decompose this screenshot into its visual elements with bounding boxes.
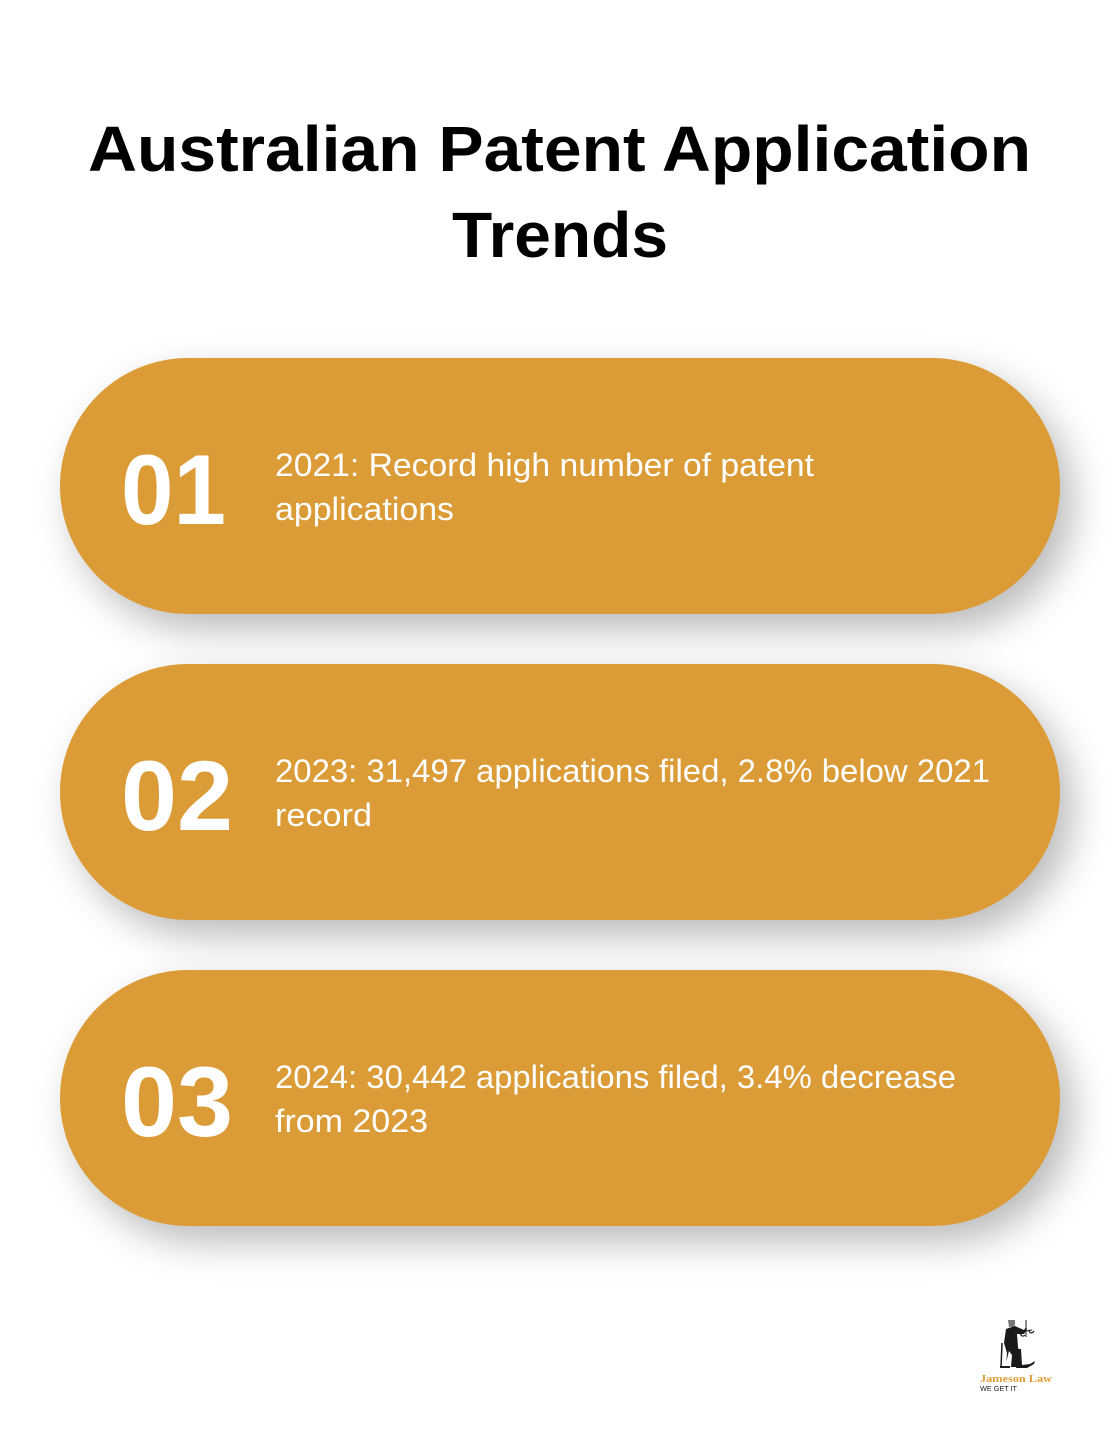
logo: Jameson Law xyxy=(980,1320,1052,1393)
number 02: 02 xyxy=(121,740,233,851)
text: 2021 trend: applications xyxy=(275,491,454,527)
title: Trends xyxy=(452,199,668,271)
icon: lady justice xyxy=(1000,1320,1035,1368)
text: 2021 trend xyxy=(275,447,814,527)
panel: 2023 filings xyxy=(60,664,1060,920)
text: 2024 trend: from 2023 xyxy=(275,1103,428,1139)
text: 2024 trend: 2024: 30,442 applications filed, 3.4% decrease xyxy=(275,1059,956,1095)
title: Australian Patent Application xyxy=(88,113,1031,185)
panel: 2021 record xyxy=(60,358,1060,614)
logo wordmark: Jameson Law xyxy=(980,1373,1052,1385)
logo tagline: WE GET IT xyxy=(980,1386,1018,1393)
text: 2023 trend xyxy=(275,753,990,833)
number 03: 03 xyxy=(121,1046,233,1157)
text: 2024 trend xyxy=(275,1059,956,1139)
text: 2023 trend: 2023: 31,497 applications filed, 2.8% below 2021 xyxy=(275,753,990,789)
panel: 2024 filings xyxy=(60,970,1060,1226)
title xyxy=(88,113,1031,271)
text: 2023 trend: record xyxy=(275,797,372,833)
number 01: 01 xyxy=(121,434,226,545)
text: 2021 trend: 2021: Record high number of patent xyxy=(275,447,814,483)
